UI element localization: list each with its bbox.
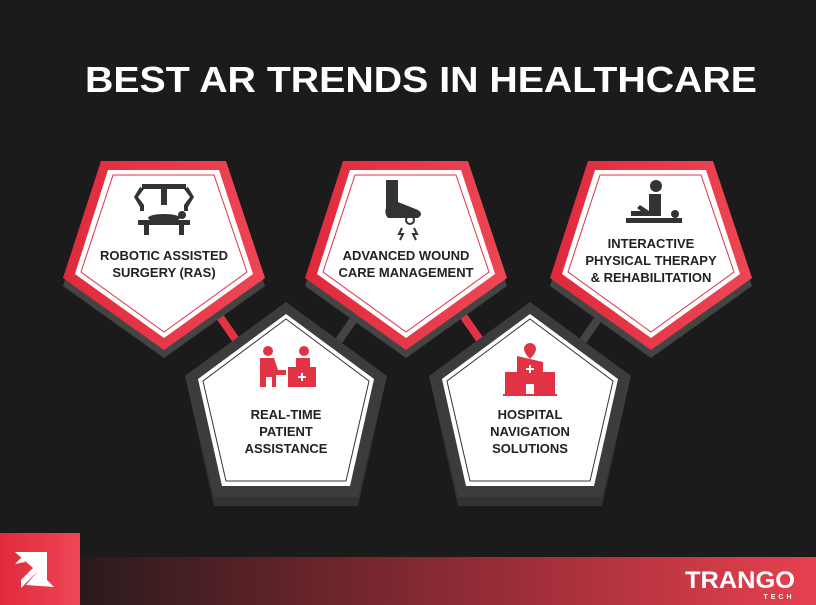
- footer bar: [80, 557, 816, 605]
- brand logo: TRANGO: [685, 567, 795, 594]
- panel: interactive physical therapy: & REHABILITATION: [591, 270, 711, 285]
- panel: advanced wound care: CARE MANAGEMENT: [338, 265, 474, 280]
- panel: real-time patient assistance: PATIENT: [259, 424, 313, 439]
- logo square: [0, 533, 80, 605]
- icon: therapist: [626, 180, 682, 223]
- label: REAL-TIME: [251, 407, 322, 422]
- panel: real-time patient assistance: [185, 302, 387, 506]
- icon: foot: [385, 180, 421, 240]
- panel: hospital navigation: [429, 302, 631, 506]
- label: ADVANCED WOUND: [343, 248, 469, 263]
- panel: interactive physical therapy: [550, 161, 752, 358]
- panel: robotic assisted surgery: SURGERY (RAS): [112, 265, 216, 280]
- panel: advanced wound care: [305, 161, 507, 358]
- icon: surgical robot: [134, 184, 194, 235]
- connectors: [218, 314, 600, 342]
- panel: robotic assisted surgery: [63, 161, 265, 358]
- panel: hospital navigation: SOLUTIONS: [492, 441, 568, 456]
- brand logo: TECH: [763, 594, 795, 601]
- panel: interactive physical therapy: PHYSICAL THERAPY: [585, 253, 717, 268]
- icon: hospital pin: [503, 343, 557, 396]
- label: INTERACTIVE: [608, 236, 695, 251]
- label: ROBOTIC ASSISTED: [100, 248, 228, 263]
- title: BEST AR TRENDS IN HEALTHCARE: [85, 59, 757, 100]
- panel: real-time patient assistance: ASSISTANCE: [245, 441, 328, 456]
- panel: hospital navigation: NAVIGATION: [490, 424, 570, 439]
- icon: patient assistance: [260, 346, 316, 387]
- label: HOSPITAL: [498, 407, 562, 422]
